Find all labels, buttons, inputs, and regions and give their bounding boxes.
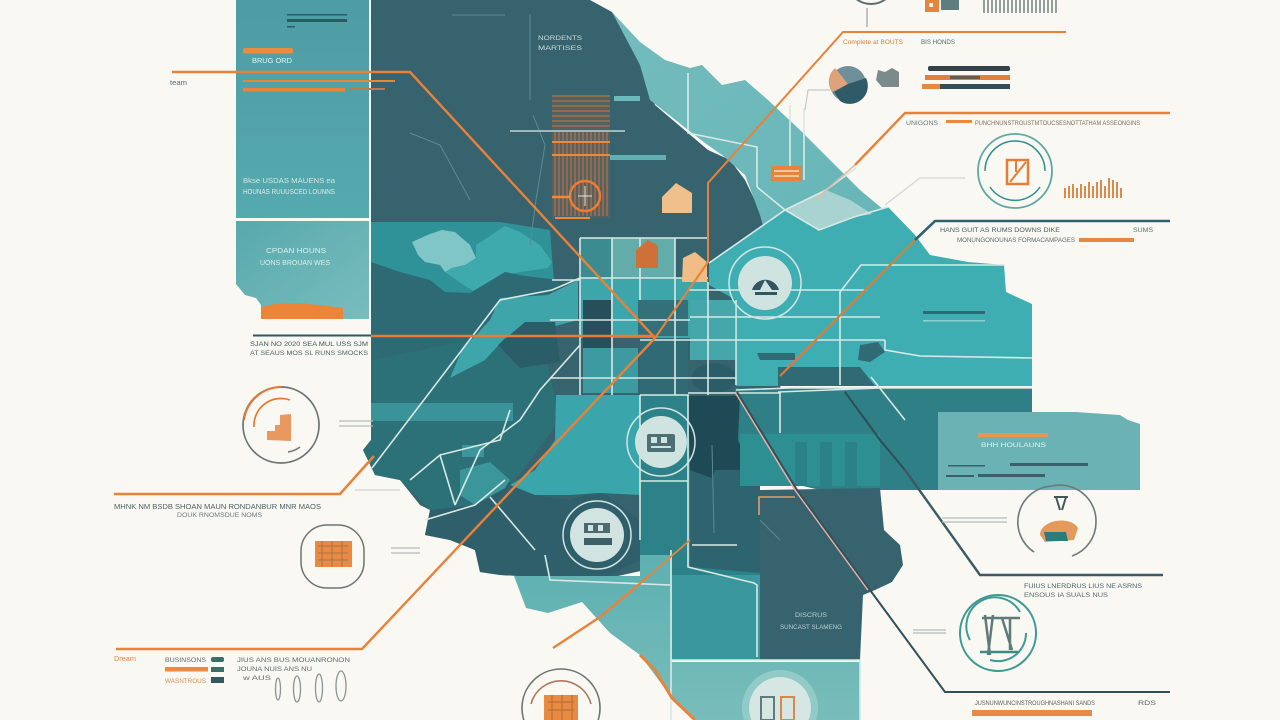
leader: thin ring connector: [885, 178, 965, 205]
text: upper right caption: Complete at BOUTS: [843, 39, 904, 46]
map label: south: [780, 612, 842, 631]
panel heading: BHH HOULAUNS: [981, 442, 1047, 449]
text: south-east caption 2: JUSNUNWUNCINSTROUGHNASHANI SANDS: [975, 701, 1095, 707]
label: orange rules: [243, 80, 395, 92]
icon: tan tag: [682, 252, 707, 282]
text: south-east caption 2: RDS: [1138, 701, 1156, 707]
leader: south orange arrow: [553, 540, 690, 648]
chart: orange striped column: [552, 95, 610, 218]
leader: south-east line 2: [735, 392, 1170, 692]
lines: badge connector: [391, 548, 420, 553]
icon: brown marker: [636, 240, 658, 268]
text: south-east caption 1: ENSOUS IA SUALS NUS: [1024, 592, 1109, 599]
map: south pale region: [514, 555, 860, 720]
icon: gondola ring: [1018, 485, 1096, 556]
text: south-east caption 1: FUIUS LNERDRUS LIUS NE ASRNS: [1024, 583, 1143, 590]
chart: oval glyphs: [276, 671, 346, 702]
panel text: pale caption: Bkse USDAS MAUENS ea: [243, 178, 335, 185]
panel: right teal label: [938, 412, 1140, 490]
lines: derrick connector: [913, 630, 946, 633]
panel text: pale caption: [260, 248, 330, 267]
icon: grey blob: [876, 68, 899, 87]
map: west mid tone: [363, 330, 560, 520]
legend: lower left: BUSINSONS: [165, 658, 206, 664]
panel text: orange heading: BRUG ORD: [252, 58, 292, 65]
orange tag: [261, 303, 343, 319]
map label: north: NORDENTS: [538, 35, 583, 42]
text: centre-left caption: AT SEAUS MOS SL RUNS SMOCKS: [250, 350, 369, 357]
icon: rounded orange badge: [301, 525, 364, 588]
map: west light band: [371, 403, 513, 421]
text: right caption 2: SUMS: [1133, 228, 1153, 234]
text: right caption 2: [940, 227, 1153, 244]
icon: top circle: [847, 0, 895, 27]
map: pale north-east region: [612, 12, 915, 250]
text: lower left caption 1: MHNK NM BSDB SHOAN MAUN RONDANBUR MNR MAOS: [114, 502, 321, 511]
map: darkest centre block: [688, 396, 750, 478]
text: upper right caption: [843, 39, 956, 46]
map: centre dark mid block: [690, 470, 760, 573]
panel text: pale caption: CPDAN HOUNS: [266, 248, 326, 255]
icon: bottom ring, orange: [522, 669, 600, 720]
map: lower east band: [735, 388, 1032, 490]
map: small west teal patches: [460, 445, 510, 505]
icon: small orange tag: [771, 166, 802, 181]
icon: orange-grey ring, west: [243, 387, 319, 463]
text: centre-left caption: [250, 341, 369, 357]
panel dark text: [946, 463, 1088, 477]
text: lower left mini caption: JIUS ANS BUS MOUANRONON: [237, 658, 350, 664]
map: road lines: [372, 73, 1032, 720]
map label: south: DISCRUS: [795, 612, 828, 619]
leader: thin pie connector: [805, 90, 830, 110]
map label: north: MARTISES: [538, 45, 583, 52]
label: team: team: [170, 80, 187, 87]
lines: gondola connector: [942, 518, 1007, 522]
text: right caption 1: PUNCHNUNSTROUSTMTOUCSESNOTTATHAM ASSEONGINS: [975, 121, 1140, 127]
icon: circle marker, south-west: [563, 501, 631, 569]
text: lower left mini caption: [237, 658, 350, 682]
icon: orange ring marker: [552, 181, 600, 211]
text: right caption 1: [906, 120, 1140, 127]
icon: teal derrick ring: [960, 595, 1036, 671]
legend: lower left: Dream: [114, 656, 136, 663]
leader: lower left orange 1: [114, 456, 374, 494]
text: right caption 2: MONUNGONOUNAS FORMACAMPAGES: [957, 237, 1076, 244]
icon: teal ring: [978, 134, 1052, 208]
map: bright wedge south of grid: [510, 395, 640, 495]
leader: upper left orange: [172, 72, 655, 338]
icon: circle marker, north-east centre: [729, 247, 801, 319]
text: lower left caption 1: DOUK RNOMSDUE NOMS: [177, 513, 262, 519]
icon: circle marker, centre: [627, 408, 695, 476]
map: dark north region: [363, 0, 790, 580]
panel text: pale caption: UONS BROUAN WES: [260, 260, 330, 267]
text: lower left mini caption: JOUNA NUIS ANS NU: [237, 667, 312, 673]
map: south-west dark shape: [425, 480, 640, 580]
leader: south-east dark line 1: [845, 392, 1163, 575]
legend: lower left: WASNTROUS: [165, 679, 206, 685]
chart: pie: [829, 66, 868, 104]
map: bright east region: [709, 207, 1032, 386]
chart label bars: [510, 96, 666, 160]
chart: stacked bars: [922, 66, 1010, 89]
icon: tan house: [662, 183, 692, 213]
panel text: pale caption: HOUNAS RUUUSCED LOUNNS: [243, 189, 335, 196]
chart: top grey stripes: [984, 0, 1056, 13]
text: right caption 1: UNIGONS: [906, 121, 938, 127]
lines: west ring connector: [339, 421, 373, 426]
map: full region: [363, 0, 1032, 720]
text: south-east caption 2: [972, 701, 1156, 716]
map: west dark lower shape: [371, 262, 560, 360]
map: south dark block: [760, 488, 903, 660]
panel text: orange heading: [243, 48, 293, 65]
map label: east: [923, 311, 985, 322]
leader: lower left orange 2: [116, 338, 655, 649]
leader: centre-left rule: [253, 334, 655, 337]
map: dark oval west of grid: [498, 322, 560, 368]
panel text: top dark lines: [287, 14, 347, 28]
map label: south: SUNCAST SLAMENG: [780, 624, 842, 631]
map: pale diagonal shade: [785, 190, 872, 230]
legend: lower left: [114, 656, 224, 685]
leader: fading connector: [815, 165, 855, 200]
map: west pale blob: [412, 230, 476, 272]
leader: upper right orange: [655, 32, 1066, 338]
line: coast annotation: [355, 489, 400, 491]
map: orange road: [759, 497, 795, 515]
chart: orange hatch: [1065, 178, 1121, 198]
map: west bright band: [371, 222, 555, 300]
text: lower left mini caption: w AUS: [241, 676, 271, 682]
map: grid cells: [580, 238, 736, 395]
map label: north: [538, 35, 583, 52]
text: lower left caption 1: [114, 502, 321, 519]
text: centre-left caption: SJAN NO 2020 SEA MUL USS SJM: [250, 341, 368, 348]
text: south-east caption 1: [1024, 583, 1143, 599]
panel heading: [978, 433, 1048, 449]
leader: right dark into orange: [780, 221, 1170, 376]
panel text: pale caption: [243, 178, 335, 196]
panel: upper left teal block: [236, 0, 369, 218]
map: faint dark-field lines: [410, 14, 780, 540]
map: east dark inlets: [757, 342, 885, 386]
map: striped teal field: [740, 434, 880, 486]
icon: bottom circle, pale: [742, 670, 818, 720]
text: right caption 2: HANS GUIT AS RUMS DOWNS DIKE: [940, 227, 1061, 234]
map: centre mid region: [640, 395, 760, 575]
leader: right orange 1: [855, 113, 1170, 165]
map: bright patch west of grid: [450, 280, 578, 378]
icon: top orange mark: [925, 0, 959, 12]
text: upper right caption: BIS HONDS: [921, 39, 956, 46]
leader: south winding orange: [640, 655, 695, 720]
map: west teal blob: [445, 226, 552, 292]
map: south centre teal block: [672, 575, 760, 660]
panel: lower left teal block: [236, 221, 369, 319]
